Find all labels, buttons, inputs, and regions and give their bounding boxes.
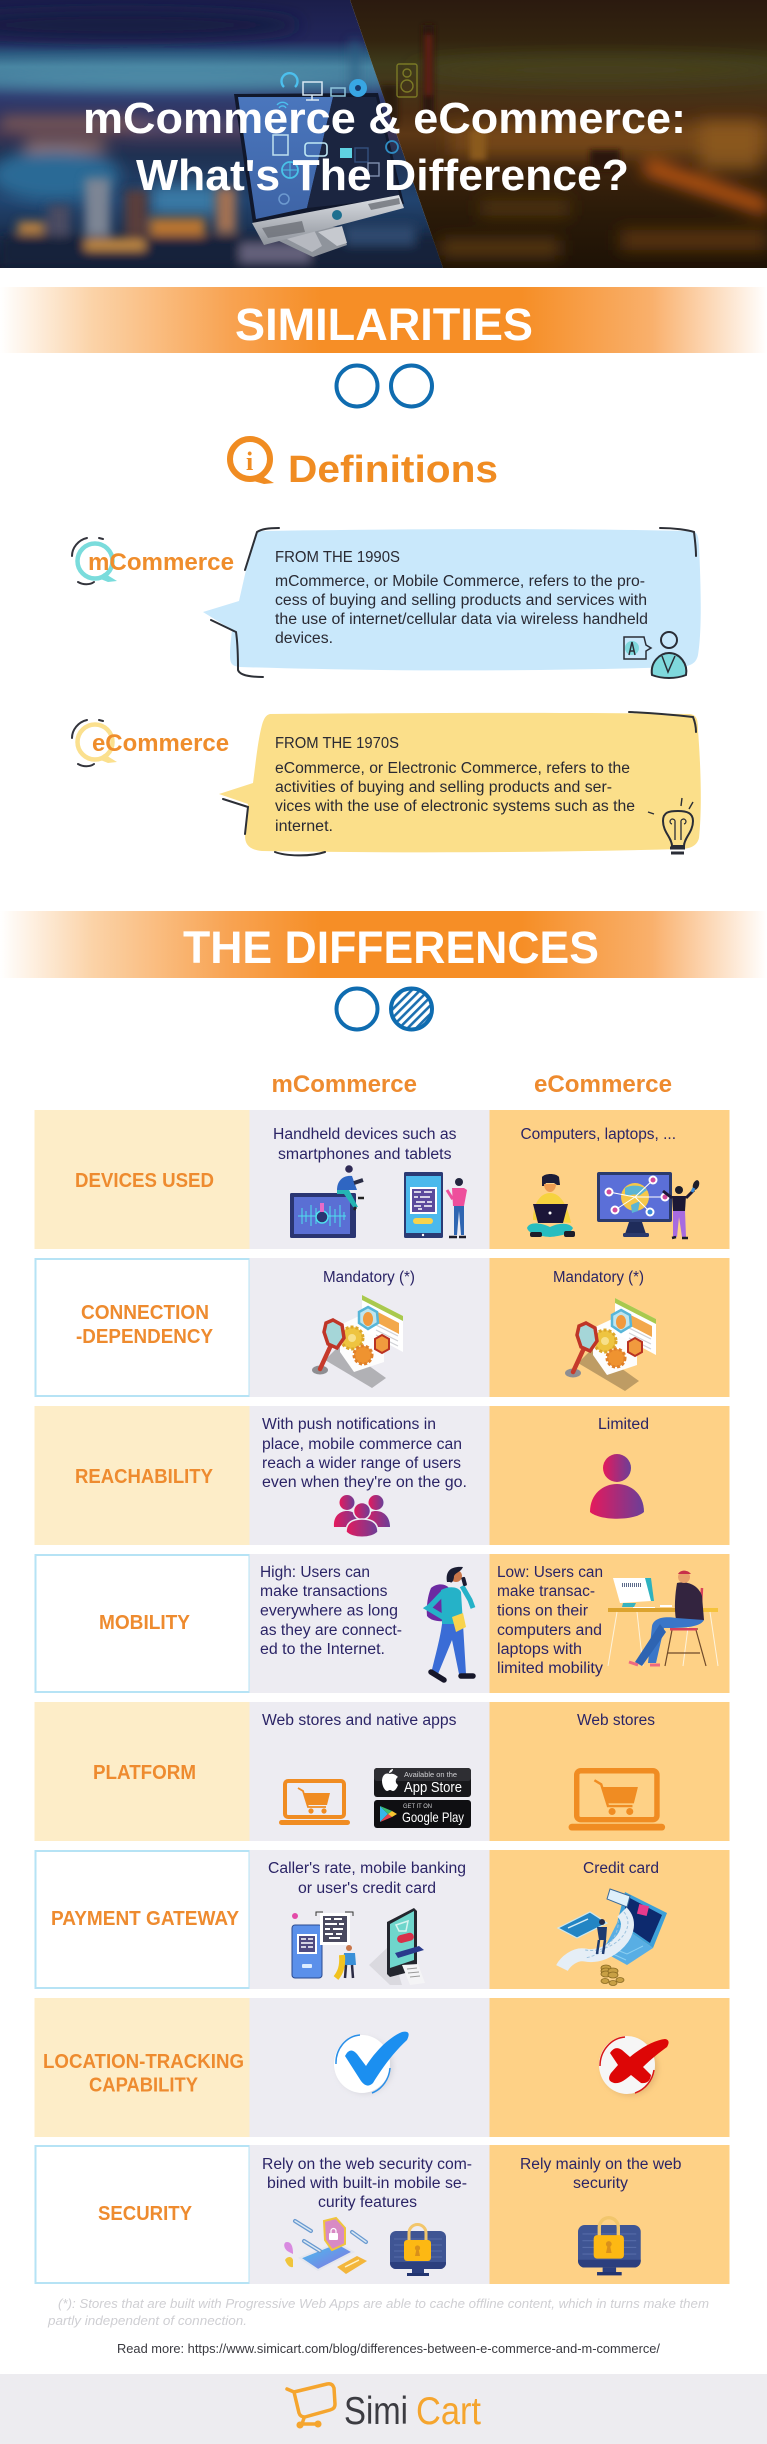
illustration: laptop, card and receipt [558,1889,667,1986]
floating app icons [273,73,398,204]
definition text: the use of internet/cellular data via wireless handheld [275,611,648,628]
logo: SimiCart: Cart [416,2390,481,2433]
footer [0,2374,767,2444]
corner brackets [223,712,696,855]
text: eCommerce mobility: Low: Users can [497,1564,603,1581]
text: eCommerce security: Rely mainly on the web [520,2156,682,2173]
row: mobility: MOBILITY [99,1612,191,1634]
text: mCommerce reachability: place, mobile commerce can [262,1436,462,1453]
text: mCommerce connection: Mandatory (*) [323,1269,415,1286]
row label [43,2051,244,2096]
icon: red cross mark [599,2036,669,2096]
section header: the differences: THE DIFFERENCES [183,922,599,973]
hero background: blue city, left half [0,0,460,268]
text: eCommerce mobility: limited mobility [497,1660,603,1677]
icon: single person [590,1454,644,1519]
badge: Google Play: Google Play [402,1809,464,1825]
row: location-tracking capability [34,1998,730,2137]
title [83,94,686,200]
text: mCommerce mobility: ed to the Internet. [260,1641,385,1658]
row: platform [34,1702,730,1841]
text: mCommerce reachability: With push notifications in [262,1416,436,1433]
footnote: (*): Stores that are built with Progressive Web Apps are able to cache offline content, which in turns make them [58,2296,709,2311]
text: mCommerce payment: or user's credit card [298,1880,436,1897]
hero banner [0,0,767,268]
column headers: eCommerce [534,1071,672,1098]
row: devices used: DEVICES USED [75,1170,214,1192]
text: eCommerce mobility [497,1564,603,1677]
icon: plain and hatched circles [336,988,432,1030]
text: eCommerce connection: Mandatory (*) [553,1269,644,1286]
icon: blue check mark [334,2032,409,2094]
text: mCommerce reachability [262,1416,467,1491]
text: mCommerce devices: smartphones and tablets [278,1146,452,1163]
text: eCommerce payment: Credit card [583,1860,659,1877]
illustration: phone with shield [284,2218,367,2274]
text: eCommerce mobility: laptops with [497,1641,582,1658]
text: mCommerce security: bined with built-in mobile se- [267,2175,467,2192]
monitor illustration [234,73,404,257]
row label: -DEPENDENCY [76,1326,214,1348]
text: eCommerce reachability: Limited [598,1416,649,1433]
section header: the differences [0,911,767,978]
text: eCommerce devices: Computers, laptops, ... [520,1126,676,1143]
corner brackets [211,528,696,677]
text: mCommerce reachability: even when they're on the go. [262,1474,467,1491]
definitions heading: Definitions [288,449,498,491]
text: mCommerce security: curity features [318,2194,417,2211]
illustration: magnifier and gears [312,1295,403,1388]
definition text: cess of buying and selling products and services with [275,592,647,609]
text: mCommerce mobility: everywhere as long [260,1602,398,1620]
text: eCommerce platform: Web stores [577,1712,655,1729]
icon: group of people [334,1495,390,1537]
title: mCommerce & eCommerce: [83,94,686,143]
logo: SimiCart: Simi [344,2390,408,2433]
icon: speaker [397,64,417,97]
text: mCommerce mobility [260,1564,402,1658]
column headers: mCommerce [272,1071,417,1098]
text: mCommerce devices [273,1126,457,1163]
definition text: internet. [275,818,333,835]
row: mobility [36,1554,730,1693]
text: mCommerce security: Rely on the web security com- [262,2156,472,2173]
text: mCommerce mobility: make transactions [260,1583,388,1600]
section header: similarities [0,287,767,353]
section header: similarities: SIMILARITIES [235,299,533,350]
text: mCommerce mobility: as they are connect- [260,1622,402,1639]
column headers [272,1071,672,1098]
text: eCommerce mobility: make transac- [497,1583,595,1600]
icon: speaker with speech bubble [624,632,686,678]
row: connection-dependency [36,1258,730,1397]
illustration: QR payment on phone [292,1912,356,1978]
mCommerce label with icon: mCommerce [88,549,234,576]
row label: CONNECTION [81,1302,209,1324]
row label [76,1302,214,1348]
row: payment gateway: PAYMENT GATEWAY [51,1908,240,1930]
logo: SimiCart [287,2384,481,2433]
eCommerce label with icon: eCommerce [92,730,229,757]
illustration: man at desk [608,1571,718,1666]
illustration: walking man with backpack [427,1567,473,1680]
text: mCommerce mobility: High: Users can [260,1564,370,1581]
definition text: activities of buying and selling products and ser- [275,779,612,796]
icon: teal chat ring [72,538,117,584]
icon: laptop with cart [279,1781,350,1825]
text: mCommerce payment [268,1860,466,1897]
illustration: tablet with seated person [290,1165,364,1238]
icon: light bulb [648,798,693,853]
icon: info chat bubble: i [246,447,253,476]
row: devices used [34,1110,730,1249]
text: mCommerce security [262,2156,472,2211]
illustration: large monitor with padlock [578,2218,641,2275]
text: mCommerce reachability: reach a wider range of users [262,1455,461,1472]
definitions heading [230,439,498,491]
eCommerce label with icon [72,720,229,766]
panel: mCommerce definition [203,528,701,678]
row: security: SECURITY [98,2203,193,2225]
illustration: phone with QR code and person [404,1172,467,1238]
text: eCommerce security: security [573,2175,628,2192]
footnote [47,2296,709,2328]
text: eCommerce mobility: tions on their [497,1602,588,1620]
text: mCommerce devices: Handheld devices such as [273,1126,457,1143]
text: mCommerce platform: Web stores and native apps [262,1712,457,1729]
text: eCommerce security [520,2156,682,2192]
icon: cart [287,2384,335,2427]
row label: CAPABILITY [89,2074,199,2096]
row: platform: PLATFORM [93,1762,196,1784]
definition text: devices. [275,630,333,647]
definition text [275,573,648,647]
read more link: Read more: https://www.simicart.com/blog/differences-between-e-commerce-and-m-commerce/ [117,2341,660,2356]
definition text: vices with the use of electronic systems such as the [275,798,635,815]
mCommerce label with icon [72,538,234,584]
footnote: partly independent of connection. [47,2313,247,2328]
illustration: person with laptop [527,1174,575,1237]
badge: Google Play: GET IT ON [403,1803,432,1810]
badge: App Store: App Store [404,1779,462,1796]
icon: two overlapping-set circles [336,366,432,406]
row: payment gateway [36,1850,730,1989]
title: What's The Difference? [136,151,629,200]
illustration: magnifier and gears, eCommerce [565,1298,656,1391]
icon: info chat bubble [230,439,274,484]
illustration: monitor with padlock [390,2224,446,2276]
hero background: orange city, right half [340,0,767,268]
badge: App Store [374,1768,471,1797]
row label: LOCATION-TRACKING [43,2051,244,2073]
icon: yellow chat ring [72,720,117,766]
row: reachability: REACHABILITY [75,1466,214,1488]
text: mCommerce payment: Caller's rate, mobile banking [268,1860,466,1877]
panel: eCommerce definition [219,712,701,855]
text: from the 1990s: FROM THE 1990S [275,549,400,566]
definition text [275,760,635,835]
text: from the 1970s: FROM THE 1970S [275,735,399,752]
definition text: mCommerce, or Mobile Commerce, refers to the pro- [275,573,645,590]
illustration: monitor with globe and man [597,1172,701,1238]
badge: Google Play [374,1800,471,1828]
badge: App Store: Available on the [404,1772,457,1779]
text: eCommerce mobility: computers and [497,1622,602,1639]
icon: large laptop with cart [569,1771,665,1831]
illustration: phone payment terminal [369,1908,425,1985]
row: security [36,2145,730,2284]
row: reachability [34,1406,730,1545]
definition text: eCommerce, or Electronic Commerce, refers to the [275,760,630,777]
